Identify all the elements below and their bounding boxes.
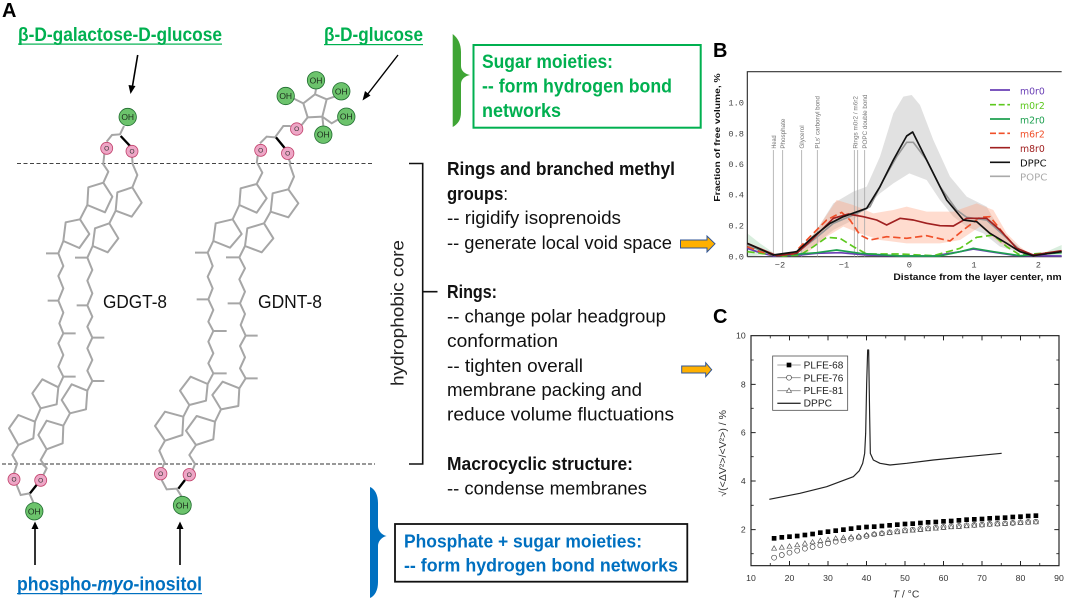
legend: m8r0: [1020, 144, 1045, 155]
OH labels: OH: [335, 86, 348, 96]
landmark lines: [773, 150, 865, 257]
oxygen labels: O: [104, 146, 109, 152]
x tick labels: 30: [823, 573, 833, 583]
y tick labels: 2: [741, 525, 746, 535]
y axis label: √(<ΔV²>/<V²>) / %: [718, 410, 729, 497]
bottom headgroup bonds: [14, 463, 195, 502]
legend: m0r0: [1020, 86, 1045, 97]
landmark labels: Rings m0r2 / m6r2: [854, 95, 860, 149]
axes frame: [747, 72, 1062, 257]
OH labels: OH: [121, 112, 134, 122]
OH labels: OH: [317, 130, 330, 140]
legend: PLFE-76: [804, 373, 844, 384]
legend: PLFE-81: [804, 386, 844, 397]
x tick labels: 70: [977, 573, 987, 583]
legend: PLFE-68: [804, 360, 844, 371]
x tick labels: −2: [775, 260, 785, 270]
OH labels: OH: [279, 91, 292, 101]
yellow arrow to panel B: [680, 236, 715, 252]
x tick labels: 20: [785, 573, 794, 583]
landmark labels: Head: [772, 135, 778, 149]
text: rings: -- change polar headgroup: [447, 306, 666, 327]
legend: DPPC: [1020, 159, 1047, 170]
hydrophobic core label: hydrophobic core: [388, 240, 408, 386]
oxygen labels: O: [38, 478, 43, 484]
oxygen labels: O: [294, 126, 299, 133]
callout: sugar moieties: Sugar moieties:: [482, 52, 613, 73]
y tick labels: 0.4: [728, 191, 744, 201]
OH groups: [26, 72, 355, 520]
text: macrocyclic structure: -- condense membranes: [447, 477, 647, 498]
y tick labels: 1.0: [728, 98, 744, 108]
x tick labels: 2: [1036, 260, 1041, 270]
callout: sugar moieties: networks: [482, 101, 561, 122]
OH labels: OH: [176, 500, 189, 510]
oxygen labels: O: [11, 476, 17, 484]
x tick labels: −1: [839, 260, 849, 270]
y tick labels: 0.2: [728, 222, 744, 232]
landmark labels: POPC double bond: [863, 95, 869, 149]
y tick labels: [728, 98, 744, 262]
OH labels: OH: [310, 75, 322, 85]
x tick labels: 0: [907, 260, 912, 270]
PLFE-76 series: [774, 522, 1036, 558]
x tick labels: 60: [939, 573, 948, 583]
x tick labels: 80: [1016, 573, 1025, 583]
label: beta-D-glucose: β-D-glucose: [324, 25, 423, 46]
x axis label: Distance from the layer center, nm: [893, 272, 1062, 282]
curves: [747, 132, 1062, 256]
x tick labels: [775, 260, 1041, 270]
green brace: [453, 34, 470, 127]
legend: POPC: [1020, 173, 1047, 184]
blue brace: [370, 487, 387, 598]
y tick labels: 4: [741, 476, 746, 486]
oxygen atoms: [8, 123, 303, 486]
bands: [747, 95, 1062, 257]
oxygen labels: O: [129, 148, 135, 156]
y tick labels: 10: [736, 331, 746, 341]
oxygen labels: O: [258, 148, 263, 154]
callout: sugar moieties: -- form hydrogen bond: [482, 77, 672, 98]
label: beta-D-galactose-D-glucose: β-D-galactose-D-glucose: [18, 25, 222, 46]
x tick labels: [746, 573, 1064, 583]
PLFE-68 series: [774, 516, 1036, 538]
text: macrocyclic structure: Macrocyclic structure:: [447, 453, 633, 474]
membrane boundary bottom: [2, 463, 375, 465]
OH labels: [28, 75, 353, 516]
landmark labels: [772, 95, 869, 149]
hydrophobic core bracket: [409, 164, 438, 464]
label: phospho-myo-inositol: phospho-myo-inositol: [17, 574, 202, 596]
GDNT-8 chains: [155, 163, 298, 464]
legend: m0r2: [1020, 101, 1045, 112]
label GDNT-8: GDNT-8: [258, 291, 322, 312]
y tick labels: 6: [741, 428, 746, 438]
label GDGT-8: GDGT-8: [103, 291, 167, 312]
plot frame and ticks: [751, 336, 1059, 566]
callout: phosphate and sugar moieties: -- form hydrogen bond networks: [404, 555, 678, 576]
text: rings and branched methyl groups: groups:: [447, 183, 508, 204]
y tick labels: 0.0: [728, 252, 744, 262]
y tick labels: 8: [741, 379, 746, 389]
panel letter A: A: [2, 0, 16, 22]
GDGT-8 chains: [9, 163, 142, 468]
legend: m2r0: [1020, 115, 1045, 126]
landmark labels: Phosphate: [781, 118, 787, 149]
oxygen labels: O: [158, 471, 163, 478]
x tick labels: 50: [900, 573, 910, 583]
text: rings: conformation: [447, 330, 558, 351]
legend: [990, 86, 1047, 184]
callout: sugar moieties: [474, 45, 701, 128]
landmark labels: PLs' carbonyl bond: [816, 96, 822, 149]
DPPC curve: [769, 350, 1002, 499]
yellow arrow to panel C: [682, 363, 712, 377]
OH labels: OH: [28, 506, 41, 516]
OH labels: OH: [340, 112, 353, 122]
landmark labels: Glycerol: [800, 125, 806, 149]
oxygen labels: O: [285, 150, 290, 158]
arrow to inositol right: [176, 522, 184, 565]
text: rings and branched methyl groups: [447, 158, 675, 253]
callout: phosphate and sugar moieties: [395, 524, 687, 582]
text: rings and branched methyl groups: -- rigidify isoprenoids: [447, 207, 621, 228]
text: rings: membrane packing and: [447, 379, 642, 400]
panel A: lipid structures: [2, 25, 423, 596]
arrow to glucose: [362, 55, 398, 100]
text: rings and branched methyl groups: -- generate local void space: [447, 232, 672, 253]
text: rings and branched methyl groups: Rings and branched methyl: [447, 158, 675, 179]
text: rings: Rings:: [447, 281, 497, 302]
x tick labels: 40: [862, 573, 871, 583]
text: macrocyclic structure: [447, 453, 647, 498]
text: rings: reduce volume fluctuations: [447, 404, 674, 425]
panel letter B: B: [713, 40, 727, 62]
y tick labels: 0.8: [728, 129, 744, 139]
membrane boundary top: [17, 162, 373, 164]
legend: m6r2: [1020, 130, 1045, 141]
panel letter C: C: [713, 306, 727, 328]
x tick labels: 90: [1054, 573, 1064, 583]
text: rings: [447, 281, 674, 425]
oxygen labels: [11, 126, 299, 484]
y tick labels: 0.6: [728, 160, 744, 170]
y axis label: Fraction of free volume, %: [712, 73, 722, 202]
legend: DPPC: [804, 399, 832, 410]
arrow to galactose-glucose: [128, 55, 138, 94]
top headgroup bonds: [103, 89, 338, 163]
x axis label: T / °C: [893, 589, 919, 600]
oxygen labels: O: [187, 472, 192, 479]
panel C: volume fluctuation chart: [718, 331, 1064, 600]
panel B: free volume chart: [712, 72, 1062, 282]
PLFE-81 series: [774, 522, 1036, 548]
legend: [773, 356, 848, 410]
y tick labels: [736, 331, 746, 535]
callout: phosphate and sugar moieties: Phosphate + sugar moieties:: [404, 530, 642, 551]
x tick labels: 10: [746, 573, 756, 583]
text: rings: -- tighten overall: [447, 355, 583, 376]
arrow to inositol left: [32, 522, 38, 565]
x tick labels: 1: [971, 260, 977, 270]
